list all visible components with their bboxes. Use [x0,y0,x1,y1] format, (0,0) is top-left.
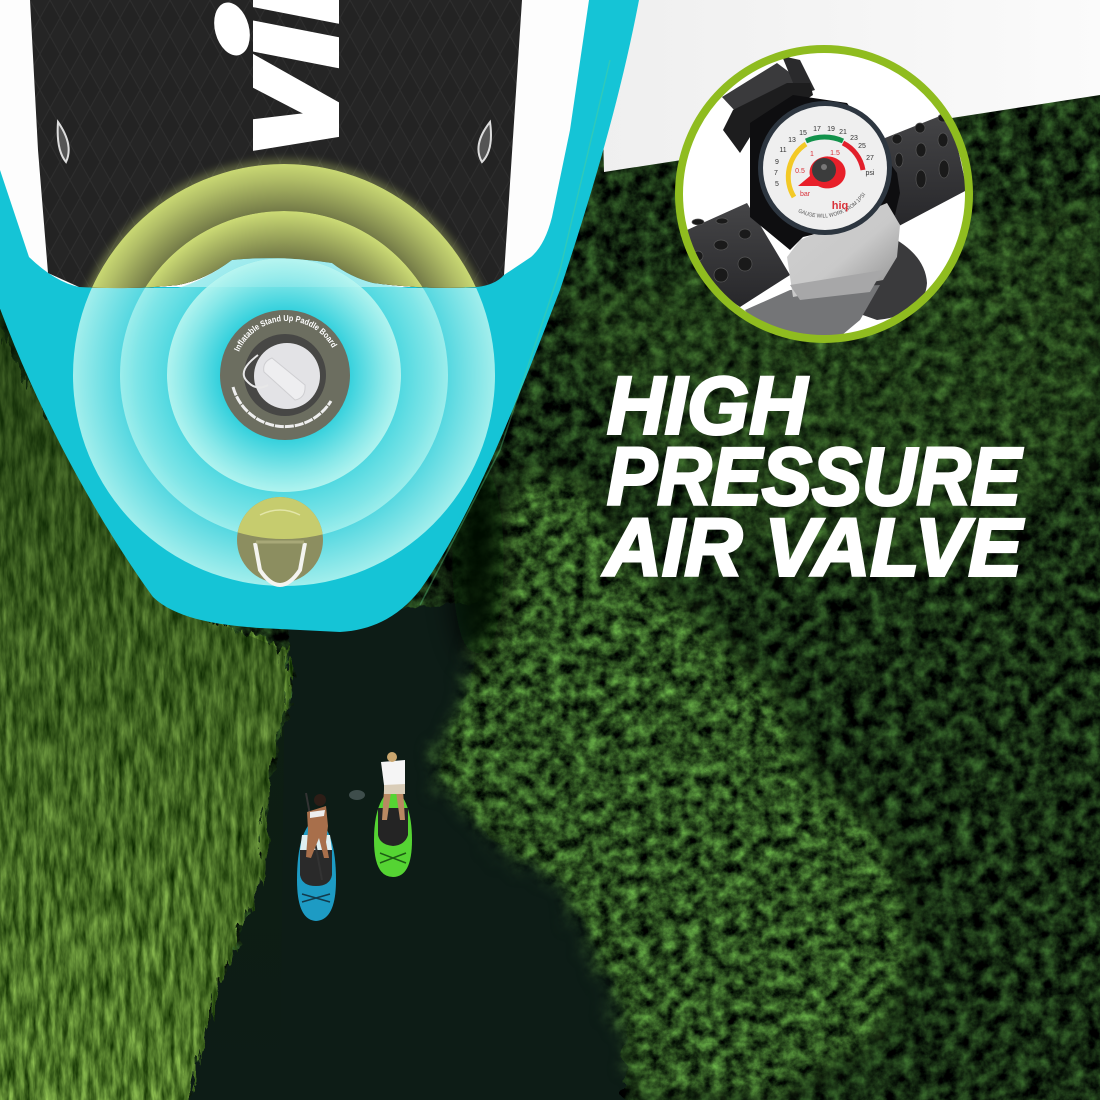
swimwear [310,810,325,818]
bar numbers: 1.5 [830,150,840,157]
river [180,600,625,1100]
paddler on green board [374,752,412,877]
studio backdrop [600,0,1100,172]
glowing rings [68,159,500,591]
green seam line [420,60,610,605]
psi numbers: 5 [775,181,779,188]
dial bezel [758,101,892,235]
blue board deck [300,850,332,886]
paddler shorts [384,783,405,794]
patch highlight [238,497,323,539]
gauge note [798,184,871,218]
pump gauge lens [675,45,973,343]
pointer hub [812,158,836,182]
neck [745,285,880,335]
psi numbers: 17 [813,126,821,133]
patch [237,497,323,583]
lower silver band [790,272,876,300]
psi numbers: psi [866,170,875,177]
sunlit tree canopy [432,475,915,1100]
water ripple [349,790,365,800]
board shadow on trees [452,460,504,660]
paddler legs [382,790,405,820]
line: HIGH: HIGH [607,360,809,452]
psi numbers: 27 [866,155,874,162]
bungee straps [302,894,330,902]
bar numbers [795,150,840,198]
gauge dial [758,101,892,235]
psi numbers: 21 [839,129,847,136]
right grip [885,112,967,227]
D-ring bar [256,540,304,544]
ribbed collar [723,83,813,153]
psi numbers: 11 [779,147,787,154]
right deck ring [478,122,491,162]
silver bracket [787,203,900,297]
green ring [679,49,969,339]
left grip dimples [692,218,752,282]
paddler head [314,794,326,806]
grass bank [0,280,290,1100]
dial face [763,106,887,230]
left deck ring [58,122,69,162]
line: PRESSURE: PRESSURE [607,432,1023,522]
bar numbers: 0.5 [795,168,805,175]
green board deck [378,808,408,846]
blue board [297,818,336,921]
psi numbers: 23 [850,135,858,142]
brand logo [214,0,339,151]
right grip dimples [892,114,949,188]
psi numbers: 13 [788,137,796,144]
red arc [843,143,863,170]
blue board white panel [300,835,332,850]
D-ring [255,543,305,585]
hose [722,63,793,110]
bar numbers: 1 [810,151,814,158]
yellow arc [788,144,806,197]
left grip [687,203,790,307]
psi numbers: 7 [774,170,778,177]
line: AIR VALVE: AIR VALVE [602,502,1024,594]
gauge dial: GAUGE WILL WORK FROM 1PSI [798,192,866,218]
paddler shirt [381,760,405,785]
paddler body [306,806,329,858]
inflatable paddle board [0,0,639,632]
patch arc [260,510,300,515]
psi numbers: 25 [858,143,866,150]
air valve: Inflatable Stand Up Paddle Board [234,315,338,352]
valve tether [244,355,268,388]
paddle [306,793,322,880]
hub screw [821,164,827,170]
lens background [679,49,969,339]
teal hull [0,0,639,632]
valve bottom label [233,387,331,427]
D-ring patch [237,497,323,585]
rings on deck [82,155,485,288]
psi numbers: 9 [775,159,779,166]
paddler on blue board [297,793,336,921]
air valve [220,310,350,440]
gauge brand: hiq [832,200,848,212]
green board [374,787,412,877]
base plate [862,241,927,320]
rings on hull [73,258,495,586]
psi numbers [774,126,875,188]
paddler head [387,752,397,762]
thin hose [783,58,815,91]
pointer [798,156,846,188]
psi numbers: 15 [799,130,807,137]
bungee straps [380,853,406,863]
pump parts [687,56,967,345]
valve inner recess [244,334,326,416]
valve base [220,310,350,440]
title [602,360,1024,594]
valve top label [239,321,338,365]
white side rail [0,0,589,287]
upper right foliage [560,200,1100,570]
valve cap [254,343,320,409]
bar numbers: bar [800,191,811,198]
green arc [806,137,843,141]
black traction deck [30,0,522,288]
gauge housing [750,95,900,250]
valve cap handle [264,358,305,400]
psi numbers: 19 [827,126,835,133]
